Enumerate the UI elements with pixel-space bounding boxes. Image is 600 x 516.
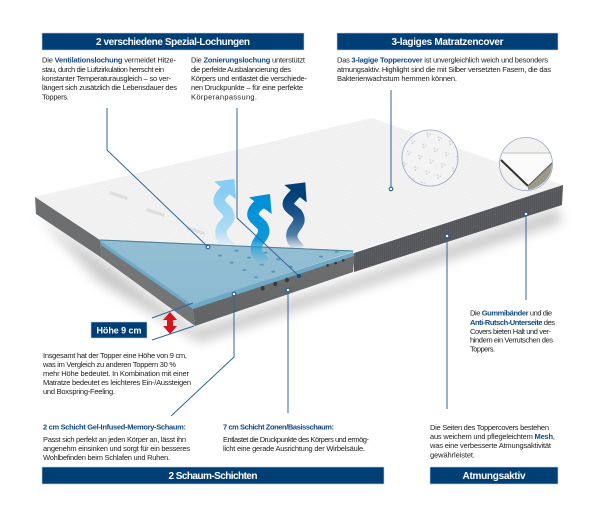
text: cover xyxy=(337,56,551,83)
text: memory foam layer: Passt sich perfekt an jeden Körper an, lässt ihn xyxy=(43,435,186,444)
text: ventilation xyxy=(42,56,177,101)
text: breathable sides: gewährleistet. xyxy=(430,450,475,459)
text: zoning: die perfekte Ausbalancierung des xyxy=(191,65,291,74)
gel foam layer edge xyxy=(100,240,354,309)
ventilation holes xyxy=(218,250,339,278)
mattress topper illustration xyxy=(35,118,563,342)
panel: special perforations header xyxy=(42,33,304,50)
left side panel xyxy=(35,197,102,258)
text: ventilation: stau, durch die Luftzirkulation herrscht ein xyxy=(42,65,164,74)
text: ventilation: Die Ventilationslochung vermeidet Hitze- xyxy=(42,56,176,64)
callout: memory foam leader line xyxy=(171,292,236,416)
text: height description: Insgesamt hat der Topper eine Höhe von 9 cm, xyxy=(43,351,187,360)
side zoning holes xyxy=(261,259,345,291)
text: height description: Matratze bedeutet es leichteres Ein-/Aussteigen xyxy=(43,378,191,387)
text: base foam layer: licht eine gerade Ausrichtung der Wirbelsäule. xyxy=(223,444,365,453)
callout: mesh leader line xyxy=(445,234,449,409)
callout: elastic bands leader line xyxy=(524,212,528,300)
icon: mid blue airflow arrow xyxy=(249,194,272,263)
text: cover: atmungsaktiv. Highlight sind die mit Silber versetzten Fasern, die das xyxy=(337,65,551,74)
text: ventilation: längert sich zusätzlich die Lebensdauer des xyxy=(42,83,177,92)
gel foam layer xyxy=(100,240,353,304)
printed logos on cover xyxy=(109,191,205,235)
height indicator xyxy=(91,303,194,340)
text: base foam layer: 7 cm Schicht Zonen/Basisschaum: xyxy=(223,422,334,432)
text: elastic bands: Anti-Rutsch-Unterseite des xyxy=(470,318,555,327)
height label: Höhe 9 cm xyxy=(96,325,142,335)
text: breathable sides: aus weichem und pflegeleichtem Mesh, xyxy=(430,432,555,441)
panel: foam layers footer xyxy=(42,467,384,484)
text: zoning: Körperanpassung. xyxy=(191,92,257,101)
drop shadow xyxy=(38,208,562,342)
text: zoning: Körpers und entlastet die verschiede- xyxy=(191,74,308,83)
panel: breathable footer: Atmungsaktiv xyxy=(462,471,526,482)
text: memory foam layer xyxy=(43,422,190,462)
text: cover: Bakterienwachstum hemmen können. xyxy=(337,74,457,83)
top cover surface xyxy=(35,118,563,252)
text: height description: was im Vergleich zu anderen Toppern 30 % xyxy=(42,360,176,369)
text: memory foam layer: Wohlbefinden beim Schlafen und Ruhen. xyxy=(43,453,170,462)
detail circle: cover fabric xyxy=(402,130,458,186)
text: ventilation: konstanter Temperaturausgleich – so ver- xyxy=(42,74,172,83)
text: elastic bands: Die Gummibänder und die xyxy=(470,308,552,318)
text: base foam layer: Entlastet die Druckpunkte des Körpers und ermög- xyxy=(223,435,370,444)
text: elastic bands xyxy=(470,308,555,353)
text: ventilation: Toppers. xyxy=(42,92,69,101)
text: elastic bands: Covers bieten Halt und ver- xyxy=(470,327,552,336)
callout: cover leader line xyxy=(389,90,393,191)
panel: foam layers footer: 2 Schaum-Schichten xyxy=(168,471,258,482)
text: height description: und Boxspring-Feeling. xyxy=(43,387,115,396)
text: memory foam layer: angenehm einsinken und sorgt für ein besseres xyxy=(43,444,190,453)
callout: zoning leader line xyxy=(237,108,301,278)
panel: breathable footer xyxy=(430,467,558,484)
text: zoning: Die Zonierungslochung unterstützt xyxy=(191,56,306,64)
foam side left xyxy=(100,240,195,326)
text: height description xyxy=(42,351,191,396)
text: breathable sides xyxy=(429,423,555,459)
text: breathable sides: was eine verbesserte Atmungsaktivität xyxy=(429,441,552,450)
text: memory foam layer: 2 cm Schicht Gel-Infused-Memory-Schaum: xyxy=(43,422,186,432)
icon: dark blue airflow arrow xyxy=(284,182,307,249)
text: breathable sides: Die Seiten des Toppercovers bestehen xyxy=(430,423,549,432)
panel: special perforations header: 2 verschiedene Spezial-Lochungen xyxy=(96,37,250,48)
text: zoning xyxy=(191,56,308,101)
foam top edge xyxy=(100,240,353,251)
icon: red double arrow xyxy=(163,312,177,334)
text: cover: Das 3-lagige Toppercover ist unvergleichlich weich und besonders xyxy=(337,56,548,64)
panel: mattress cover header xyxy=(337,33,558,50)
foam side front xyxy=(192,253,355,326)
text: base foam layer xyxy=(223,422,370,453)
panel: mattress cover header: 3-lagiges Matratzencover xyxy=(392,37,504,48)
text: elastic bands: hindern ein Verrutschen des xyxy=(470,336,553,344)
icon: light blue airflow arrow xyxy=(214,179,236,247)
text: height description: mehr Höhe bedeutet. In Kombination mit einer xyxy=(43,369,190,378)
side mesh panel right xyxy=(354,185,563,272)
text: zoning: nen Druckpunkte – für eine perfekte xyxy=(191,83,303,92)
text: elastic bands: Toppers. xyxy=(470,344,495,353)
callout: base foam leader line xyxy=(286,288,290,413)
detail circle: cover corner xyxy=(500,138,552,190)
callout: ventilation leader line xyxy=(107,108,210,249)
